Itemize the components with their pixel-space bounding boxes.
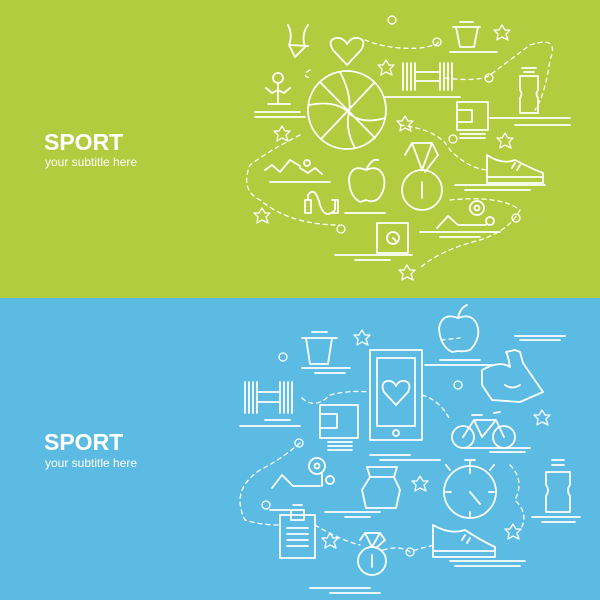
top: basketball: [308, 71, 386, 149]
bottom: phone: [370, 350, 422, 440]
top: bottle: [520, 68, 538, 113]
bottom: apple: [425, 305, 492, 365]
bottom: medal: [310, 533, 386, 593]
bottom: clipboard: [280, 505, 315, 558]
stars: [254, 16, 550, 556]
top: trash can: [450, 22, 497, 52]
top: scale box: [335, 223, 412, 260]
top: yoga figure: [255, 73, 305, 117]
top: dashed paths: [247, 40, 552, 268]
top: dumbbell: [385, 63, 460, 97]
bottom extra lines: [270, 455, 440, 510]
bottom: bicep: [482, 336, 565, 402]
bottom: wallet: [320, 405, 358, 450]
top: shoe: [455, 155, 545, 190]
bottom: bicycle: [452, 412, 530, 452]
bottom: dumbbell: [240, 382, 300, 426]
bottom: kettlebell: [325, 467, 400, 517]
subtitle top: your subtitle here: [45, 155, 137, 169]
top: apple: [345, 160, 385, 213]
bottom: shoe: [433, 525, 525, 566]
bottom: trash can: [302, 332, 350, 373]
panel: green top: [0, 0, 600, 298]
top: medal: [402, 143, 442, 210]
top: heart: [331, 38, 363, 65]
subtitle bottom: your subtitle here: [45, 456, 137, 470]
bottom: dashed paths: [240, 338, 524, 552]
top: swimmer: [265, 160, 330, 182]
bottom: bottle: [532, 460, 580, 522]
title top: SPORT: [44, 129, 123, 155]
bottom: situps: [272, 458, 334, 488]
title bottom: SPORT: [44, 429, 123, 455]
top: jump rope: [305, 192, 338, 214]
top: bikini body: [288, 25, 308, 57]
bottom: stopwatch: [444, 460, 496, 518]
top: situps: [420, 201, 500, 237]
panel: blue bottom: [0, 298, 600, 600]
top: wallet: [457, 102, 570, 138]
